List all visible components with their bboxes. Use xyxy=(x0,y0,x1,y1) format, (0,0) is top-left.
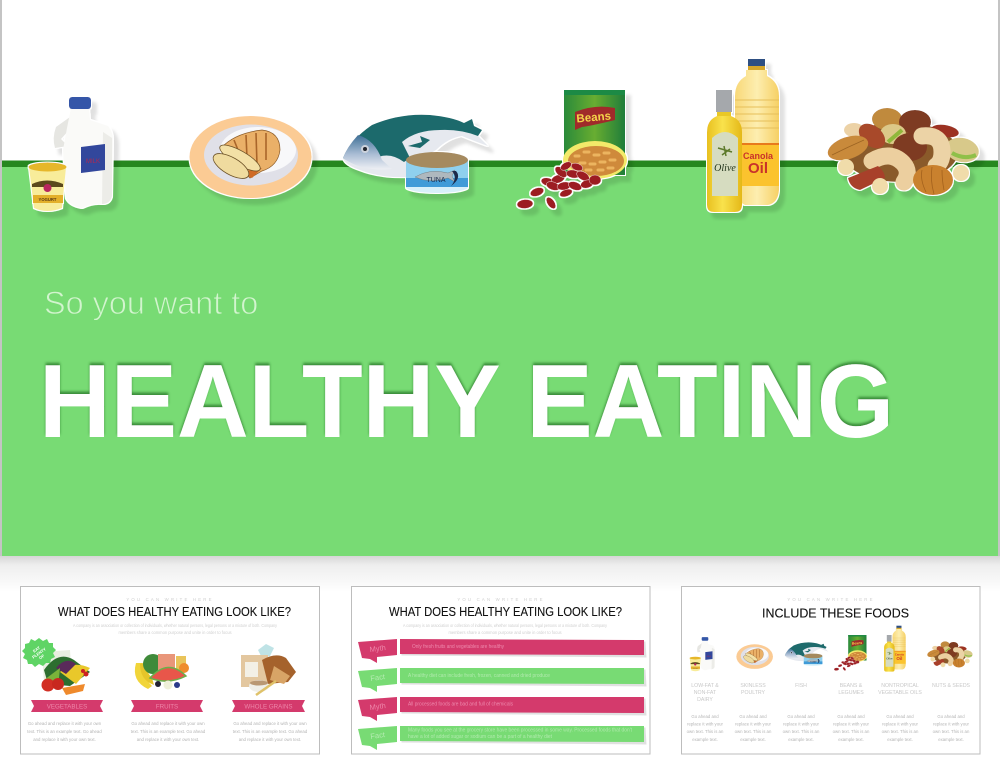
column text: fish: own text. This is an xyxy=(783,729,820,734)
column text: poultry: replace it with your xyxy=(735,722,771,726)
row: myth 2: Myth xyxy=(369,701,386,712)
small heading: YOU CAN WRITE HERE xyxy=(457,597,545,602)
text: whole grains xyxy=(233,721,308,742)
text: vegetables: Go ahead and replace it with your own xyxy=(28,721,102,726)
column text: nuts: example text. xyxy=(938,737,964,742)
row: fact 2: Fact xyxy=(370,730,386,741)
panel: myths and facts xyxy=(352,586,650,754)
icon: vegetables xyxy=(42,650,90,695)
text: fruits xyxy=(131,721,206,742)
icon: chicken on plate xyxy=(190,116,312,198)
column text: fish: FISH xyxy=(795,683,807,689)
icon: olive and canola oil bottles: Olive xyxy=(714,163,736,174)
icon: poultry xyxy=(736,644,773,669)
column text: dairy xyxy=(687,683,724,742)
icon: milk and yogurt: MILK xyxy=(86,159,100,165)
ribbon: vegetables: VEGETABLES xyxy=(47,704,87,710)
column text: nuts: own text. This is an xyxy=(933,729,970,734)
small heading: YOU CAN WRITE HERE xyxy=(787,597,875,602)
text: vegetables xyxy=(27,721,102,742)
column text: dairy: DAIRY xyxy=(697,697,713,703)
icon: nuts xyxy=(926,641,973,668)
column text: dairy: Go ahead and xyxy=(691,714,719,719)
intro text xyxy=(73,623,278,635)
row: myth 1: Myth xyxy=(369,643,386,654)
row: fact 1 xyxy=(358,668,646,692)
column text: poultry: example text. xyxy=(740,737,766,742)
column text: nuts: Go ahead and xyxy=(937,714,965,719)
icon: fruits xyxy=(135,654,189,690)
badge: eat plenty of xyxy=(22,638,56,667)
column text: oils: VEGETABLE OILS xyxy=(878,690,922,696)
column text: poultry: SKINLESS xyxy=(740,683,766,689)
column text: fish: example text. xyxy=(788,737,814,742)
column text: oils: NONTROPICAL xyxy=(881,683,919,689)
badge: eat plenty of: PLENTY xyxy=(31,646,47,660)
column text: beans: LEGUMES xyxy=(838,690,864,696)
column text: beans: own text. This is an xyxy=(833,729,870,734)
column text: oils xyxy=(878,683,922,742)
column text: beans xyxy=(833,683,870,742)
intro text: members share a common purpose and unite in order to focus xyxy=(118,630,232,635)
icon: beans xyxy=(834,635,867,671)
ribbon: fruits xyxy=(131,700,203,712)
badge: eat plenty of: EAT xyxy=(32,645,41,654)
column text: dairy: NON-FAT xyxy=(694,690,717,696)
intro text xyxy=(403,623,608,635)
text: whole grains: Go ahead and replace it with your own xyxy=(233,721,307,726)
intro text: A company is an association or collection of individuals, whether natural persons, legal persons or a mixture of both. Company xyxy=(73,623,278,628)
column text: poultry: POULTRY xyxy=(741,690,766,696)
icon: dairy xyxy=(690,637,715,671)
text: whole grains: and replace it with your own text. xyxy=(239,737,301,742)
text: fruits: and replace it with your own text. xyxy=(137,737,199,742)
row: fact 1: Fact xyxy=(370,672,386,683)
row: myth 1 xyxy=(358,639,646,663)
row: fact 2: Many foods you see at the grocery store have been processed in some way. Processed foods that don't xyxy=(408,728,633,734)
icon: olive and canola oil bottles xyxy=(707,59,779,212)
badge: eat plenty of: OF xyxy=(38,653,46,660)
text: vegetables: text. This is an example text. Go ahead xyxy=(27,729,102,734)
intro text: A company is an association or collection of individuals, whether natural persons, legal persons or a mixture of both. Company xyxy=(403,623,608,628)
panel: include these foods xyxy=(682,586,980,754)
column text: beans: BEANS & xyxy=(840,683,863,689)
icon: pile of nuts xyxy=(825,108,981,195)
icon: fish xyxy=(785,642,828,666)
heading: INCLUDE THESE FOODS xyxy=(762,606,909,620)
row: fact 2: have a lot of added sugar or sodium can be a part of a healthy diet xyxy=(408,734,553,740)
icon: olive and canola oil bottles: Oil xyxy=(748,160,768,177)
column text: fish xyxy=(783,683,820,742)
panel: main title slide xyxy=(0,0,1000,556)
column text: oils: example text. xyxy=(887,737,913,742)
column text: oils: own text. This is an xyxy=(882,729,919,734)
heading: WHAT DOES HEALTHY EATING LOOK LIKE? xyxy=(58,604,291,619)
title: HEALTHY EATING: HEALTHY EATING xyxy=(39,343,894,460)
ribbon: whole grains xyxy=(232,700,305,712)
text: fruits: Go ahead and replace it with your own xyxy=(131,721,205,726)
row: myth 2 xyxy=(358,697,646,721)
column text: poultry: own text. This is an xyxy=(735,729,772,734)
icon: whole grains xyxy=(241,644,296,695)
row: myth 2: All processed foods are bad and full of chemicals xyxy=(408,702,513,708)
panel: what healthy eating looks like, food groups xyxy=(20,586,320,754)
column text: fish: replace it with your xyxy=(783,722,819,726)
column text: nuts: NUTS & SEEDS xyxy=(932,683,971,689)
column text: poultry: Go ahead and xyxy=(739,714,767,719)
icon: milk and yogurt: YOGURT xyxy=(39,197,57,202)
slide shadow xyxy=(0,556,1000,592)
column text: fish: Go ahead and xyxy=(787,714,815,719)
icon: olive and canola oil bottles: Canola xyxy=(743,151,774,161)
subtitle: So you want to: So you want to xyxy=(44,285,258,321)
column text: nuts: replace it with your xyxy=(933,722,969,726)
icon: fish and tuna can: TUNA xyxy=(426,177,446,184)
column text: beans: Go ahead and xyxy=(837,714,865,719)
icon: oils xyxy=(884,626,906,672)
text: vegetables: and replace it with your own text. xyxy=(33,737,96,742)
icon: milk and yogurt xyxy=(28,97,113,211)
column text: dairy: LOW-FAT & xyxy=(691,683,719,689)
icon: can of beans: Beans xyxy=(576,111,611,125)
ribbon: whole grains: WHOLE GRAINS xyxy=(244,704,293,710)
column text: beans: example text. xyxy=(838,737,864,742)
icon: can of beans xyxy=(517,90,627,210)
heading: WHAT DOES HEALTHY EATING LOOK LIKE? xyxy=(389,604,622,619)
column text: nuts xyxy=(932,683,971,742)
text: whole grains: text. This is an example text. Go ahead xyxy=(233,729,308,734)
ribbon: vegetables xyxy=(31,700,103,712)
icon: fish and tuna can xyxy=(343,115,488,193)
row: myth 1: Only fresh fruits and vegetables are healthy xyxy=(412,644,504,650)
intro text: members share a common purpose and unite in order to focus xyxy=(448,630,562,635)
ribbon: fruits: FRUITS xyxy=(156,704,178,710)
column text: beans: replace it with your xyxy=(833,722,869,726)
column text: poultry xyxy=(735,683,772,742)
column text: oils: replace it with your xyxy=(882,722,918,726)
small heading: YOU CAN WRITE HERE xyxy=(126,597,214,602)
column text: oils: Go ahead and xyxy=(886,714,914,719)
row: fact 2 xyxy=(358,726,646,750)
column text: dairy: replace it with your xyxy=(687,722,723,726)
column text: dairy: own text. This is an xyxy=(687,729,724,734)
column text: dairy: example text. xyxy=(692,737,718,742)
row: fact 1: A healthy diet can include fresh, frozen, canned and dried produce xyxy=(408,673,550,679)
text: fruits: text. This is an example text. Go ahead xyxy=(131,729,206,734)
